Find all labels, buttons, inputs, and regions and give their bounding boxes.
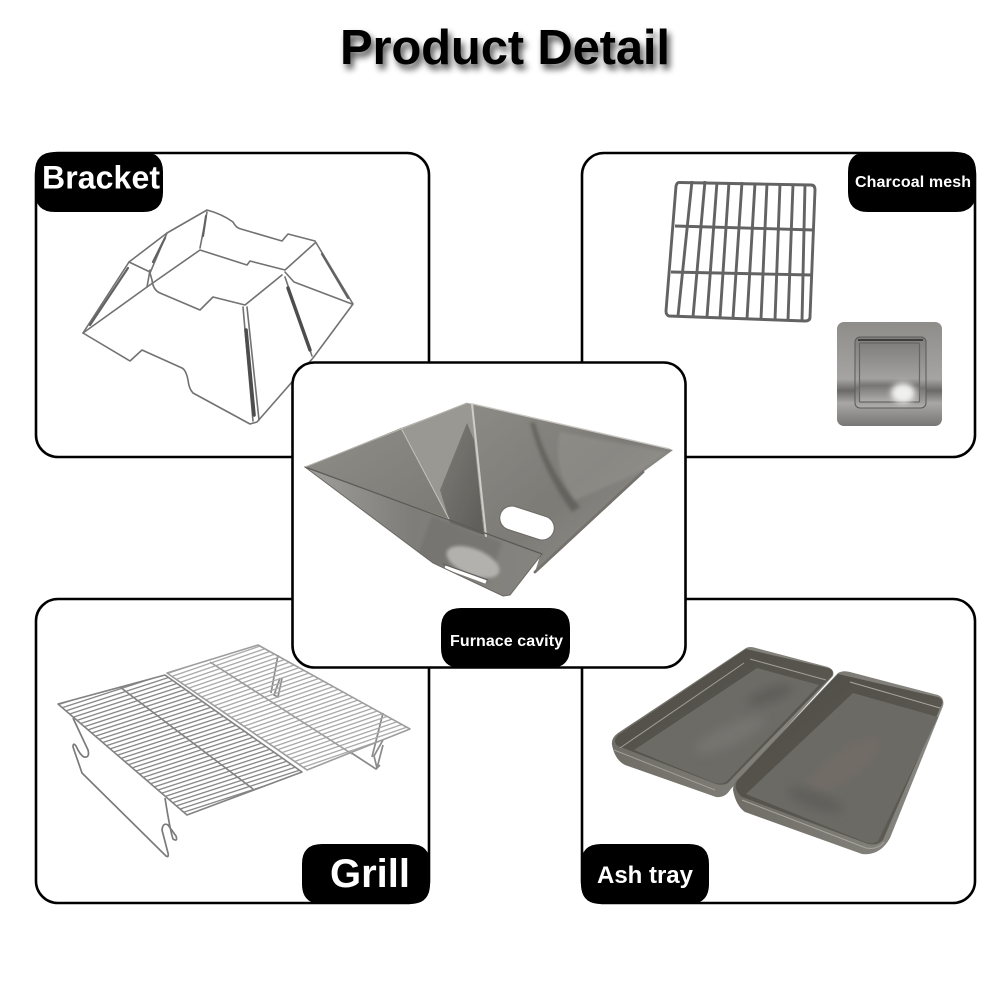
- label: Ash tray: [581, 844, 709, 904]
- label: Charcoal mesh: Charcoal mesh: [855, 174, 971, 191]
- back legs: [271, 655, 383, 769]
- icon: folding grill: [58, 645, 410, 857]
- label: Ash tray: Ash tray: [597, 862, 694, 889]
- title: Product Detail: [343, 26, 673, 80]
- icon: left tray: [612, 647, 833, 797]
- icon: furnace cavity: [305, 403, 673, 596]
- right inner panel: [473, 404, 673, 572]
- label: Bracket: Bracket: [42, 160, 160, 196]
- front legs: [73, 718, 177, 857]
- label: Grill: [302, 844, 430, 904]
- hinges and seams: [305, 403, 643, 596]
- panel: bracket: [35, 152, 429, 457]
- back panel: [401, 403, 484, 535]
- right grill panel: [167, 645, 410, 770]
- inner corner: [440, 423, 484, 535]
- left inner panel: [305, 428, 449, 519]
- label: Furnace cavity: Furnace cavity: [450, 633, 563, 650]
- label: Furnace cavity: [441, 608, 570, 668]
- icon: square plate: [837, 322, 942, 426]
- panel: grill: [36, 599, 430, 904]
- panel: ash tray: [581, 599, 975, 904]
- label: Bracket: [35, 152, 163, 212]
- label: Charcoal mesh: [848, 152, 976, 212]
- front face: [305, 467, 542, 596]
- left grill panel: [58, 675, 302, 815]
- panel: charcoal mesh: [582, 152, 976, 457]
- icon: right tray: [733, 671, 943, 854]
- icon: charcoal wire mesh: [666, 181, 815, 321]
- label: Grill: Grill: [330, 852, 410, 896]
- icon: wire bracket: [83, 210, 353, 424]
- panel: furnace cavity: [292, 362, 686, 668]
- title: Product Detail: [340, 21, 670, 75]
